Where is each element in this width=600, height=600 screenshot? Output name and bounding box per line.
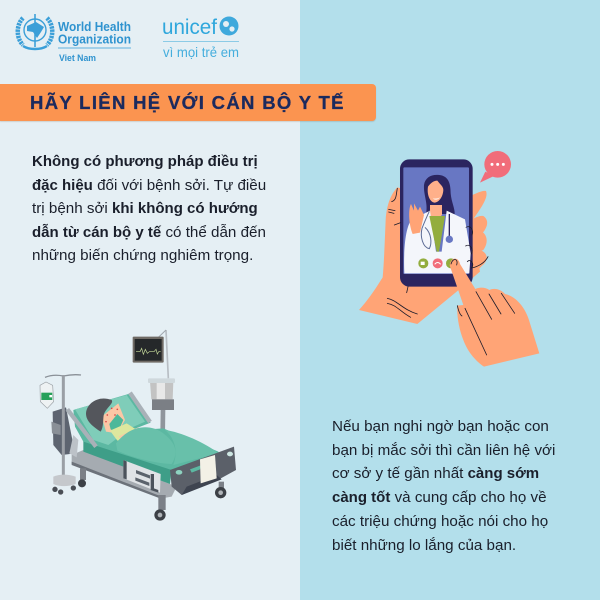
logo: WHO: Viet Nam: [59, 53, 96, 64]
bedside container: [148, 378, 175, 435]
logo: WHO: Organization: [58, 32, 131, 46]
text block: right paragraph: các triệu chứng hoặc nói cho họ: [332, 513, 548, 530]
logo: UNICEF: [162, 16, 239, 60]
chart: [200, 455, 217, 483]
text block: left paragraph: Không có phương pháp điều trị: [32, 153, 258, 170]
speech bubble: [480, 151, 511, 183]
text block: left paragraph: đặc hiệu đối với bệnh sởi. Tự điều: [32, 176, 266, 194]
banner title: HÃY LIÊN HỆ VỚI CÁN BỘ Y TẾ: [30, 92, 345, 113]
logo: WHO: World Health: [58, 19, 131, 34]
text block: left paragraph: những biến chứng nghiêm trọng.: [32, 247, 253, 264]
pillow: [75, 395, 145, 445]
pointing hand: [450, 259, 539, 367]
text block: left paragraph: trị bệnh sởi khi không có hướng: [32, 200, 258, 217]
logo: UNICEF: vì mọi trẻ em: [163, 44, 239, 60]
monitor: [133, 330, 168, 378]
logo: WHO: [18, 14, 131, 64]
banner: [0, 84, 376, 121]
panel: right blue background: [300, 0, 600, 600]
text block: right paragraph: càng tốt và cung cấp cho họ về: [332, 489, 547, 506]
text block: right paragraph: bạn bị mắc sởi thì cần liên hệ với: [332, 442, 555, 459]
holding hand: [359, 187, 487, 324]
text block: right paragraph: cơ sở y tế gần nhất càng sớm: [332, 465, 539, 482]
foot board: [170, 447, 236, 495]
text block: left paragraph: [32, 153, 266, 264]
logo: UNICEF: unicef: [162, 16, 217, 39]
text block: right paragraph: [332, 418, 555, 554]
phone: [400, 159, 473, 287]
head rails: [67, 393, 150, 447]
IV stand: [40, 375, 81, 495]
bed frame: [51, 407, 226, 521]
text block: right paragraph: biết những lo lắng của bạn.: [332, 537, 516, 554]
illustration: child patient in hospital bed: [40, 330, 236, 521]
child head with mask: [86, 399, 140, 441]
mattress and raised head: [73, 394, 222, 470]
mattress side: [83, 441, 172, 484]
text block: left paragraph: dẫn từ cán bộ y tế có thể dẫn đến: [32, 224, 266, 240]
illustration: hands holding phone with doctor video call: [359, 151, 539, 367]
bed side panel: [123, 460, 161, 493]
text block: right paragraph: Nếu bạn nghi ngờ bạn hoặc con: [332, 418, 549, 435]
blanket: [116, 427, 175, 464]
